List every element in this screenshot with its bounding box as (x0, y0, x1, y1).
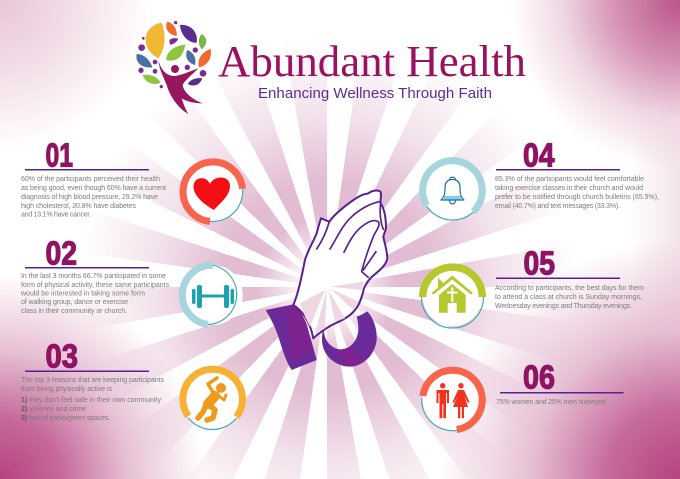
number 05: 05 (524, 244, 555, 282)
rule (500, 392, 624, 394)
icon: church in ring (422, 266, 484, 328)
panel 05: best days (422, 244, 644, 328)
title: Abundant Health (218, 37, 526, 86)
right cuff (322, 311, 377, 367)
body text 02: form of physical activity, these same participants (21, 282, 170, 289)
body text 05 (495, 285, 644, 310)
number 03: 03 (46, 338, 78, 374)
body text 03: from being physically active is (21, 386, 112, 393)
body text 05: According to participants, the best days for them (495, 285, 644, 292)
rule (496, 278, 620, 279)
body text 03: 1) they don't feel safe in their own community (21, 397, 162, 404)
faint rays inside the hand (300, 282, 364, 333)
finger lines (317, 202, 383, 277)
panel 03: barriers (21, 338, 243, 430)
number 04: 04 (523, 136, 555, 174)
body text 04: email (40.7%) and text messages (33.3%). (495, 203, 620, 210)
body text 02 (20, 273, 170, 315)
number 02: 02 (46, 234, 77, 272)
rule (25, 370, 149, 372)
body text 03: The top 3 reasons that are keeping participants (21, 377, 164, 384)
icon: running figure in ring (183, 369, 243, 430)
subtitle: Enhancing Wellness Through Faith (258, 85, 492, 102)
body text 01 (21, 176, 166, 218)
body text 05: Wednesday evenings and Thursday evenings. (495, 303, 632, 310)
hand outline (293, 191, 387, 338)
body text 01: as being good, even though 60% have a current (21, 185, 166, 192)
body text 03: 2) violence and crime (21, 406, 86, 413)
icon: bell in ring (422, 160, 482, 220)
body text 04: 85.3% of the participants would feel comfortable (495, 176, 644, 183)
icon: heart in ring (183, 162, 243, 222)
body text 01: diagnosis of high blood pressure, 29.2% have (21, 194, 158, 201)
number 01: 01 (46, 136, 73, 174)
body text 01: and 13.1% have cancer. (21, 212, 91, 218)
icon: dumbbell in ring (182, 265, 243, 325)
body text 02: In the last 3 months 66.7% participated in some (21, 273, 166, 280)
body text 06: 75% women and 25% men surveyed (496, 399, 606, 406)
body text 05: to attend a class at church is Sunday mornings, (495, 294, 642, 301)
panel 02: physical activity (20, 234, 243, 325)
panel 01: health perception (21, 136, 243, 222)
left cuff (266, 304, 317, 370)
body text 02: class in their community or church. (21, 308, 127, 315)
body text 01: 60% of the participants perceived their health (21, 176, 160, 183)
body text 04 (495, 176, 659, 210)
rule (496, 169, 620, 170)
body text 02: of walking group, dance or exercise (21, 299, 128, 306)
praying hands (266, 191, 387, 370)
body text 02: would be interested in taking some form (20, 290, 145, 298)
body text 04: prefer to be notified through church bulletins (65.9%), (495, 194, 659, 201)
body text 04: taking exercise classes in their church and would (495, 185, 643, 192)
body text 03: 3) lack of parks/green spaces. (21, 415, 110, 422)
body text 01: high cholesterol, 20.8% have diabetes (21, 203, 136, 210)
logo: tree of leaves with figure (136, 21, 211, 114)
rule (25, 267, 149, 268)
background: radiating rays (100, 60, 554, 479)
panel 04: exercise classes (422, 136, 659, 220)
body text 03 (21, 377, 164, 422)
icon: man and woman in ring (422, 370, 482, 431)
panel 06: demographics (422, 358, 624, 431)
number 06: 06 (523, 358, 555, 396)
rule (25, 169, 149, 170)
